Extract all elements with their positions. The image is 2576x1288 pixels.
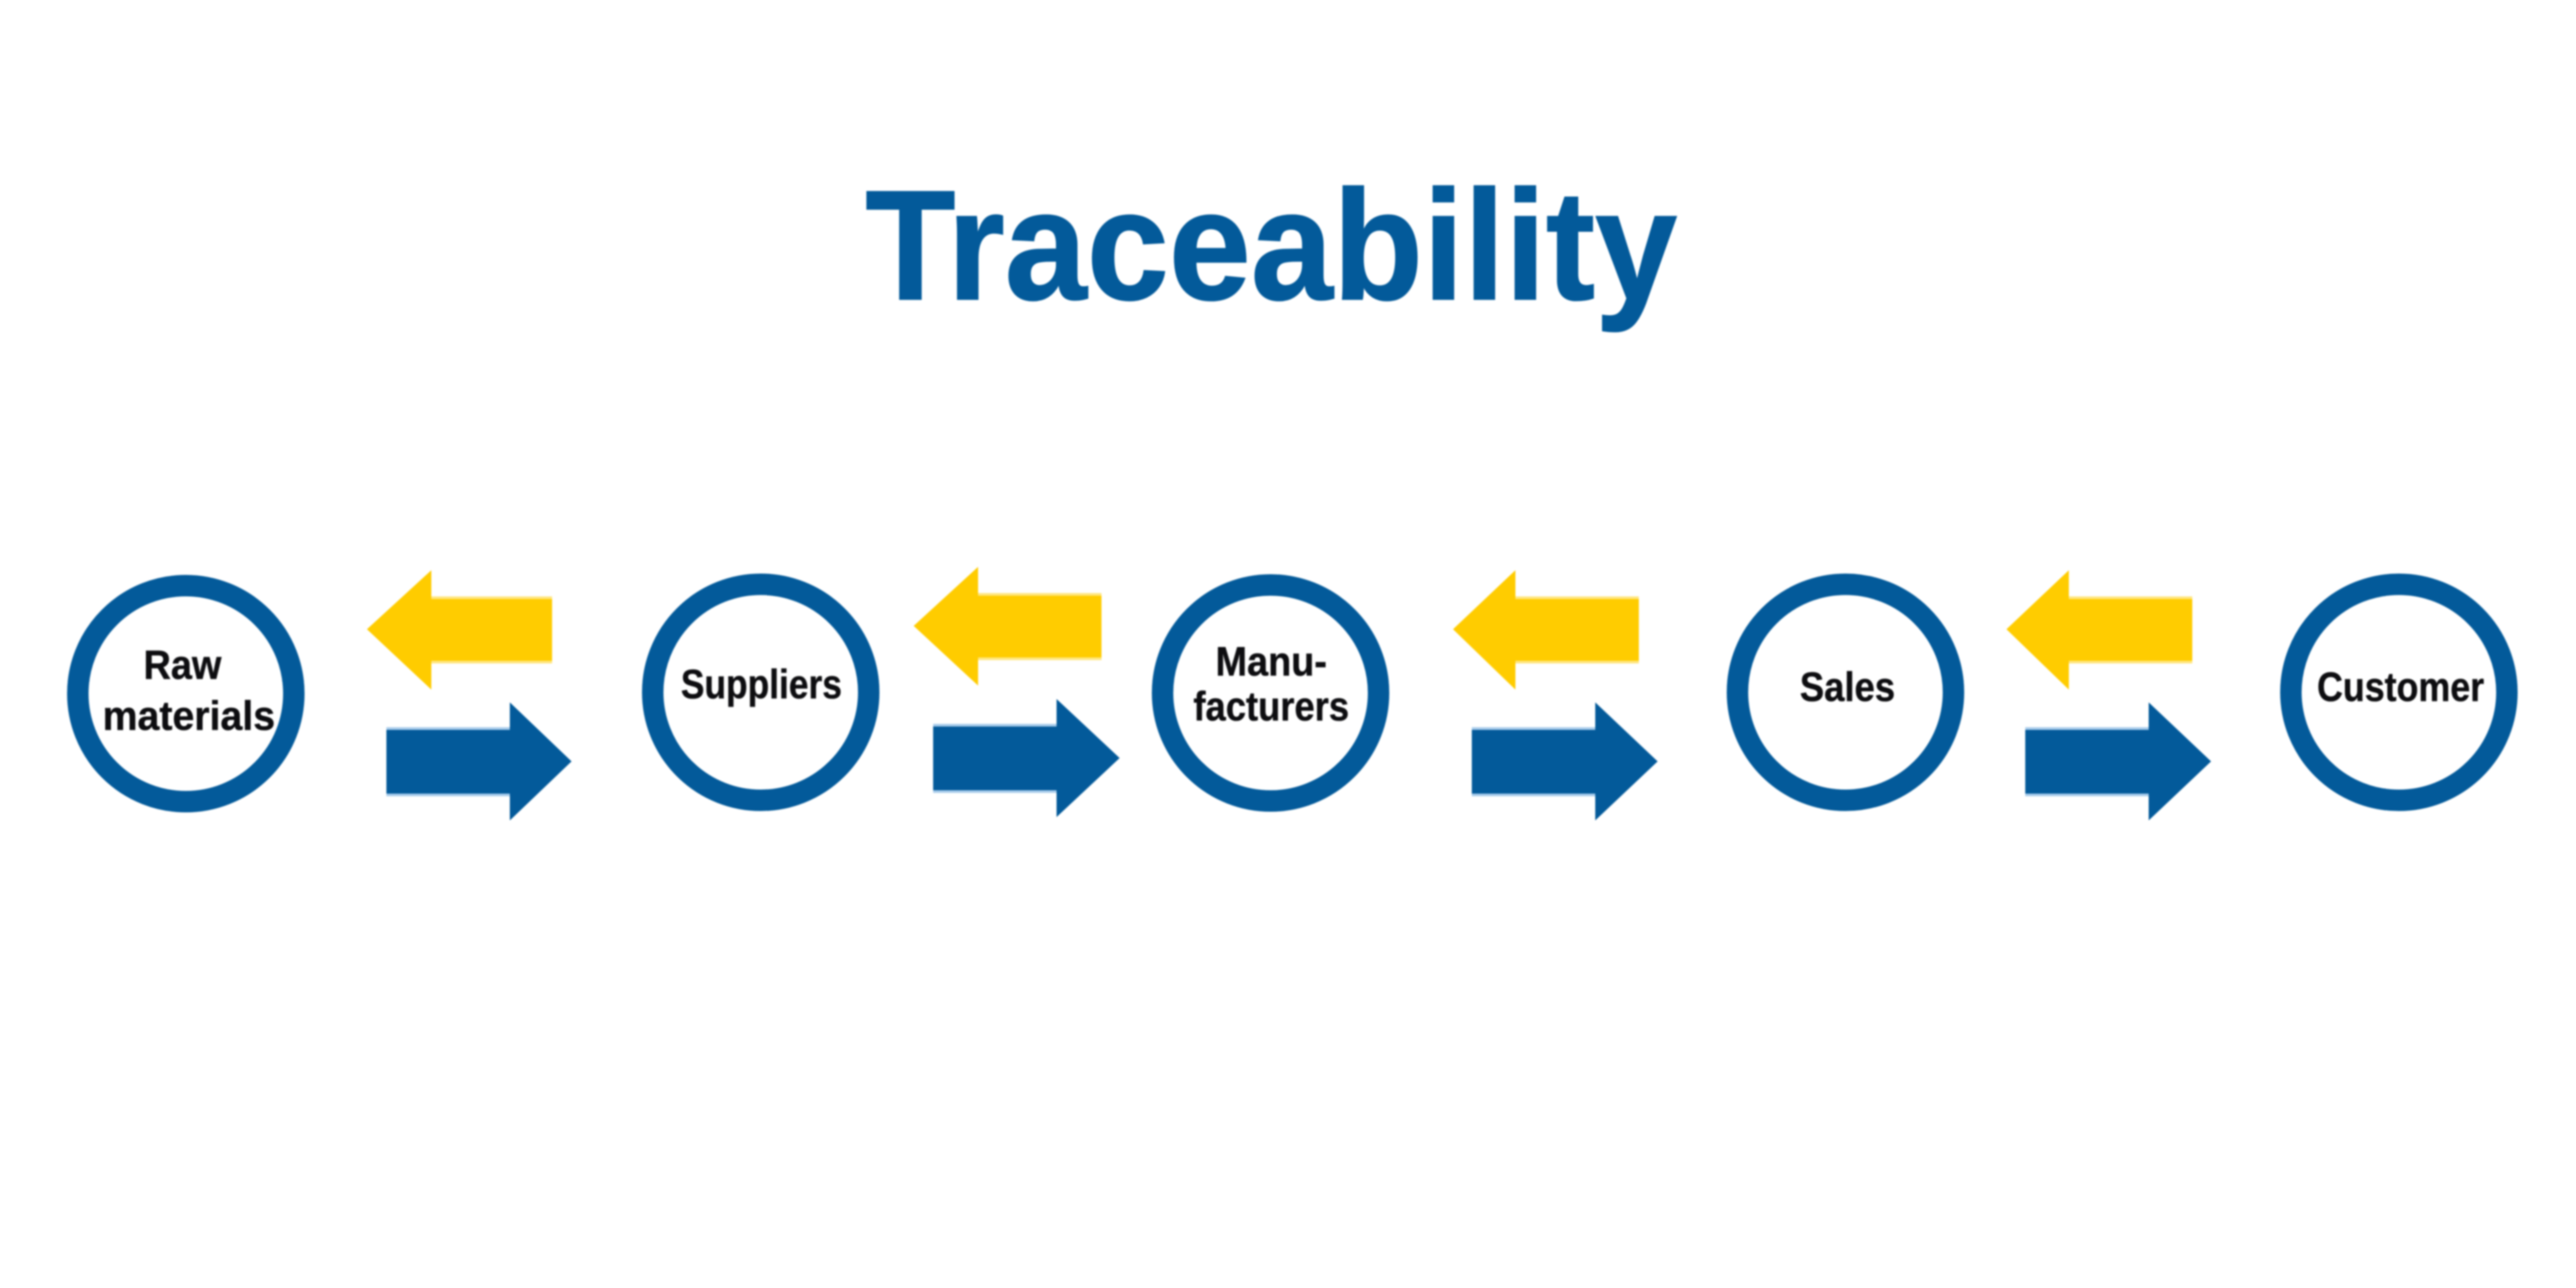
ring: manufacturers — [1163, 585, 1379, 801]
stage: customer — [2291, 584, 2507, 800]
ring: suppliers — [653, 584, 869, 800]
blue arrow: forward — [2025, 702, 2211, 820]
arrow pair: raw materials and suppliers — [367, 570, 572, 820]
yellow arrow: backward — [914, 567, 1102, 686]
title: Traceability — [865, 158, 1677, 333]
yellow arrow: backward — [367, 570, 552, 690]
stage: raw materials — [78, 586, 294, 802]
label: manufacturers: facturers — [1193, 684, 1349, 729]
label: sales: Sales — [1800, 664, 1895, 710]
arrow pair: manufacturers and sales — [1453, 570, 1658, 820]
stage: suppliers — [653, 584, 869, 800]
blue arrow: forward — [1472, 702, 1658, 820]
arrow pair: suppliers and manufacturers — [914, 567, 1120, 817]
label: manufacturers: Manu- — [1216, 639, 1327, 684]
blue arrow: forward — [933, 699, 1120, 817]
ring: raw materials — [78, 586, 294, 802]
label: suppliers: Suppliers — [681, 661, 842, 707]
yellow arrow: backward — [2006, 570, 2192, 690]
arrow pair: sales and customer — [2006, 570, 2211, 820]
stage: manufacturers — [1163, 585, 1379, 801]
label: raw materials: materials — [103, 693, 275, 739]
ring: sales — [1737, 584, 1953, 800]
label: customer: Customer — [2317, 664, 2484, 710]
ring: customer — [2291, 584, 2507, 800]
blue arrow: forward — [386, 702, 572, 820]
stage: sales — [1737, 584, 1953, 800]
yellow arrow: backward — [1453, 570, 1639, 690]
label: raw materials: Raw — [144, 642, 221, 688]
